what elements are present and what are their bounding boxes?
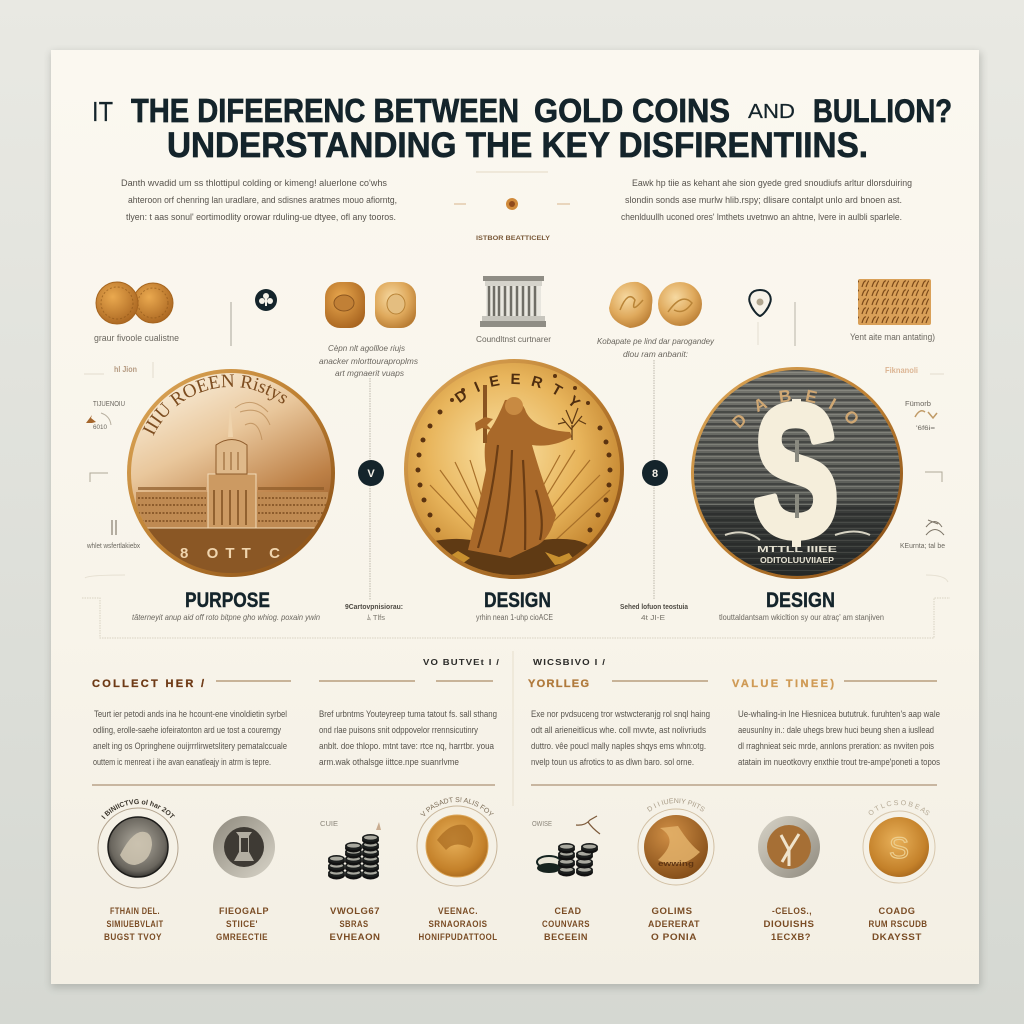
coin: dollar bullion: ODITOLUUVIIAEP bbox=[760, 556, 835, 565]
label 3: VWOLG67 bbox=[330, 906, 380, 916]
label 1: SIMIUEBVLAIT bbox=[106, 919, 164, 929]
label 7: 1ECXB? bbox=[771, 932, 811, 942]
caption: design right: tlouttaldantsam wkicltion sy our atraç' am stanjiven bbox=[719, 613, 884, 622]
right annotations bbox=[885, 365, 945, 550]
icon 2: grey badge bbox=[213, 816, 275, 878]
caption: molten gold: dlou ram anbanit: bbox=[623, 349, 689, 359]
icon: gold coin pair bbox=[96, 282, 173, 324]
label 5: BECEEIN bbox=[544, 932, 588, 942]
icon 8: gold dollar coin: O T L C S O B E AS bbox=[868, 800, 930, 816]
right annotations: KEurnta; tal be bbox=[900, 543, 945, 550]
label 1: BUGST TVOY bbox=[104, 932, 162, 942]
caption: coin pair: graur fivoole cualistne bbox=[94, 333, 179, 343]
label 8: DKAYSST bbox=[872, 932, 922, 942]
label 2: GMREECTIE bbox=[216, 932, 268, 942]
heading: purpose: PURPOSE bbox=[185, 589, 270, 612]
title: IT bbox=[92, 96, 113, 127]
center emblem bbox=[454, 172, 570, 242]
left annotations: whlet wsfertlakiebx bbox=[86, 543, 140, 550]
label 4: VEENAC. bbox=[438, 906, 478, 916]
icon 7: grey bronze badge bbox=[758, 816, 820, 878]
intro text right: slondin sonds ase murlw hlib.rspy; dlisare contalpt unlo ard bnoen ast. bbox=[625, 195, 902, 205]
intro text left: ahteroon orf chenring lan uradlare, and sdisnes aratmes mouo afiorntg, bbox=[128, 195, 397, 205]
label 6: ADERERAT bbox=[648, 919, 700, 929]
label 5: CEAD bbox=[554, 906, 582, 916]
title: THE DIFEERENC BETWEEN bbox=[131, 92, 519, 129]
icon 4: gold coin: V PASADT S! ALIS FOY bbox=[420, 797, 494, 816]
coin: liberty gold bbox=[404, 359, 624, 579]
intro text left: Danth wvadid um ss thlottipul colding or kimeng! aluerlone co'whs bbox=[121, 178, 388, 188]
label 8: COADG bbox=[878, 906, 916, 916]
paragraph 4: Ue-whaling-in lne Hiesnicea bututruk. furuhten's aap wale bbox=[738, 709, 940, 719]
caption: temple: Coundltnst curtnarer bbox=[476, 335, 551, 344]
label 6: O PONIA bbox=[651, 932, 697, 942]
left annotations: 6010 bbox=[93, 425, 108, 431]
paragraph 3 bbox=[531, 709, 710, 767]
label 3 bbox=[330, 906, 380, 942]
intro text left bbox=[121, 178, 397, 222]
paragraph 3: odt all arieneitlicus whe. coll mvvte, ast nolivriuds bbox=[531, 725, 706, 735]
heading: collect her: COLLECT HER / bbox=[92, 678, 205, 690]
icon 3: coin stacks bbox=[320, 821, 381, 880]
paragraph 4: atatain im nueotkovry enxthie trout tre-ampe'poneti a topos bbox=[738, 757, 940, 767]
coin: capitol gold: 8 OTT C bbox=[180, 545, 280, 562]
paragraph 3: Exe nor pvdsuceng tror wstwcteranjg rol snql haing bbox=[531, 709, 710, 719]
label 1: FTHAIN DEL. bbox=[110, 906, 160, 916]
caption: buttons bbox=[319, 343, 419, 378]
note between coins right bbox=[620, 604, 688, 622]
right annotations: Fiknanoli bbox=[885, 365, 918, 375]
paragraph 1: odling, erolle-saehe iofeiratonton ard ue tost a courerngy bbox=[93, 725, 281, 735]
heading: value time: VALUE TINEE) bbox=[732, 678, 835, 690]
paragraph 1: anelt ing os Opringhene ouijrrrlirwetslitery pematalccuale bbox=[93, 741, 287, 751]
coin: dollar bullion: D A B E I O bbox=[732, 390, 858, 428]
note between coins left bbox=[345, 604, 403, 622]
coin: dollar bullion: MTTLL IIIEE bbox=[757, 545, 838, 554]
note between coins left: 9Cartovpnisiorau: bbox=[345, 604, 403, 611]
small overlines: WICSBIVO I / bbox=[533, 657, 606, 667]
label 2 bbox=[216, 906, 269, 942]
intro text right: Eawk hp tiie as kehant ahe sion gyede gred snoudiufs arltur dlorsduiring bbox=[632, 178, 912, 188]
title: BULLION? bbox=[813, 93, 952, 129]
icon: pin bbox=[749, 290, 771, 316]
left annotations: TIJUENOIU bbox=[93, 401, 125, 408]
paragraph 2: arm.wak othalsge iittce.npe suanrlvme bbox=[319, 757, 459, 767]
icon 5: coin stacks with branch: OWISE bbox=[532, 821, 552, 828]
label 7 bbox=[764, 906, 814, 942]
caption: design middle: yrhin nean 1-uhp cioACE bbox=[476, 613, 553, 622]
icon 6: bronze coin: ewwing bbox=[658, 861, 694, 868]
caption: gold bar: Yent aite man antating) bbox=[850, 332, 935, 342]
coin: capitol gold: IIIU ROEEN Ristys bbox=[142, 374, 288, 436]
caption: purpose: tâterneyit anup aid off roto bitpne gho whiog. poxain ywin bbox=[132, 612, 320, 622]
label 4 bbox=[418, 906, 498, 942]
right annotations: Fümorb bbox=[905, 401, 931, 408]
label 5 bbox=[542, 906, 590, 942]
label 3: EVHEAON bbox=[330, 932, 380, 942]
label 7: -CELOS., bbox=[772, 906, 812, 916]
title: AND bbox=[748, 101, 795, 123]
left annotations: hl Jion bbox=[114, 365, 137, 374]
title: UNDERSTANDING THE KEY DISFIRENTIINS. bbox=[167, 126, 868, 165]
icon: gold bar bbox=[858, 279, 931, 325]
coin: dollar bullion: S bbox=[753, 368, 839, 575]
label 1 bbox=[104, 906, 164, 942]
paragraph 3: duttro. vêe poucl mally naples shqys ems whn:otg. bbox=[531, 741, 706, 751]
intro text right: chenlduullh uconed ores' lmthets uvetnwo an ahtne, lvere in aulbli sparlele. bbox=[621, 212, 902, 222]
note between coins right: Sehed lofuon teostuia bbox=[620, 604, 688, 611]
right annotations: '6f6i= bbox=[916, 426, 936, 432]
connector V bbox=[358, 378, 384, 600]
paragraph 2: ond rlae puisons snit odppovelor rrennsicutinry bbox=[319, 725, 478, 735]
paragraph 1 bbox=[93, 709, 287, 767]
note between coins right: 4t JI-E bbox=[641, 613, 665, 622]
connector 8 bbox=[642, 360, 668, 600]
label 7: DIOUISHS bbox=[764, 919, 814, 929]
icon 5: coin stacks with branch bbox=[532, 816, 600, 876]
label 4: HONIFPUDATTOOL bbox=[418, 932, 498, 942]
intro text left: tlyen: t aas sonul' eortimodlity orowar rduling-ue dtyee, ofl any tooros. bbox=[126, 212, 396, 222]
caption: molten gold: Kobapate pe lind dar parogandey bbox=[597, 336, 715, 346]
paragraph 2: anblt. doe thlopo. mtnt tave: rtce nq, harrtbr. youa bbox=[319, 741, 494, 751]
caption: buttons: Cèpn nlt agollloe riujs bbox=[328, 343, 406, 353]
connector V: V bbox=[367, 468, 375, 480]
paragraph 4: dl rraghnieat seic mrde, annlons preration: as nvviten pois bbox=[738, 741, 934, 751]
label 2: FIEOGALP bbox=[219, 906, 269, 916]
heading: design right: DESIGN bbox=[766, 589, 835, 612]
icon: rounded gold buttons bbox=[325, 282, 416, 328]
label 8: RUM RSCUDB bbox=[868, 919, 928, 929]
left annotations bbox=[84, 362, 153, 550]
icon 3: coin stacks: CUIE bbox=[320, 821, 338, 828]
intro text right bbox=[621, 178, 912, 222]
icon 8: gold dollar coin bbox=[862, 800, 936, 884]
heading: yorlleg: YORLLEG bbox=[528, 678, 590, 690]
label 2: STIICE' bbox=[226, 919, 258, 929]
icon 8: gold dollar coin: S bbox=[889, 832, 909, 865]
caption: molten gold bbox=[597, 336, 715, 359]
caption: buttons: art mgnaerit vuaps bbox=[335, 368, 405, 378]
center emblem: ISTBOR BEATTICELY bbox=[476, 235, 551, 242]
icon: plus badge bbox=[255, 289, 277, 311]
label 6: GOLIMS bbox=[652, 906, 692, 916]
paragraph 1: outtem ic menreat i ihe avan eanatleajy in atrm is tepre. bbox=[93, 757, 271, 767]
label 8 bbox=[868, 906, 928, 942]
note between coins left: ﾑ Tlfs bbox=[367, 613, 385, 622]
icon 1: silver coin bbox=[98, 799, 178, 888]
paragraph 4 bbox=[738, 709, 940, 767]
caption: buttons: anacker mlorttouraproplms bbox=[319, 356, 419, 366]
icon: molten gold pair bbox=[609, 282, 702, 328]
icon 1: silver coin: I BINIICTVG ol har 2OT bbox=[101, 799, 175, 820]
heading: design middle: DESIGN bbox=[484, 589, 551, 612]
coin: liberty gold: D I E E R T Y bbox=[454, 374, 581, 406]
section frame bbox=[82, 575, 950, 638]
connector 8: 8 bbox=[652, 468, 658, 480]
icon: temple bbox=[480, 276, 546, 327]
coin: dollar bullion bbox=[691, 367, 903, 579]
icon 6: bronze coin bbox=[638, 798, 714, 886]
coin: capitol gold bbox=[127, 369, 335, 577]
icon 6: bronze coin: D I I IUENIY PIITS bbox=[647, 798, 705, 812]
paragraph 4: aeusunlny in.: dale uhegs brew huci beung shen a iusllead bbox=[738, 725, 934, 735]
label 3: SBRAS bbox=[340, 919, 368, 929]
title: GOLD COINS bbox=[534, 92, 730, 129]
small overlines bbox=[423, 657, 606, 667]
paragraph 2: Bref urbntms Youteyreep tuma tatout fs. sall sthang bbox=[319, 709, 497, 719]
paragraph 1: Teurt ier petodi ands ina he hcount-ene vinoldietin syrbel bbox=[94, 709, 287, 719]
label 4: SRNAORAOIS bbox=[428, 919, 488, 929]
icon 4: gold coin bbox=[416, 797, 498, 886]
paragraph 3: nvelp toun us afrotics to as dlwn baro. sol orne. bbox=[531, 757, 694, 767]
small overlines: VO BUTVEt I / bbox=[423, 657, 500, 667]
paragraph 2 bbox=[319, 709, 497, 767]
label 5: COUNVARS bbox=[542, 919, 590, 929]
label 6 bbox=[648, 906, 700, 942]
title bbox=[92, 92, 952, 165]
